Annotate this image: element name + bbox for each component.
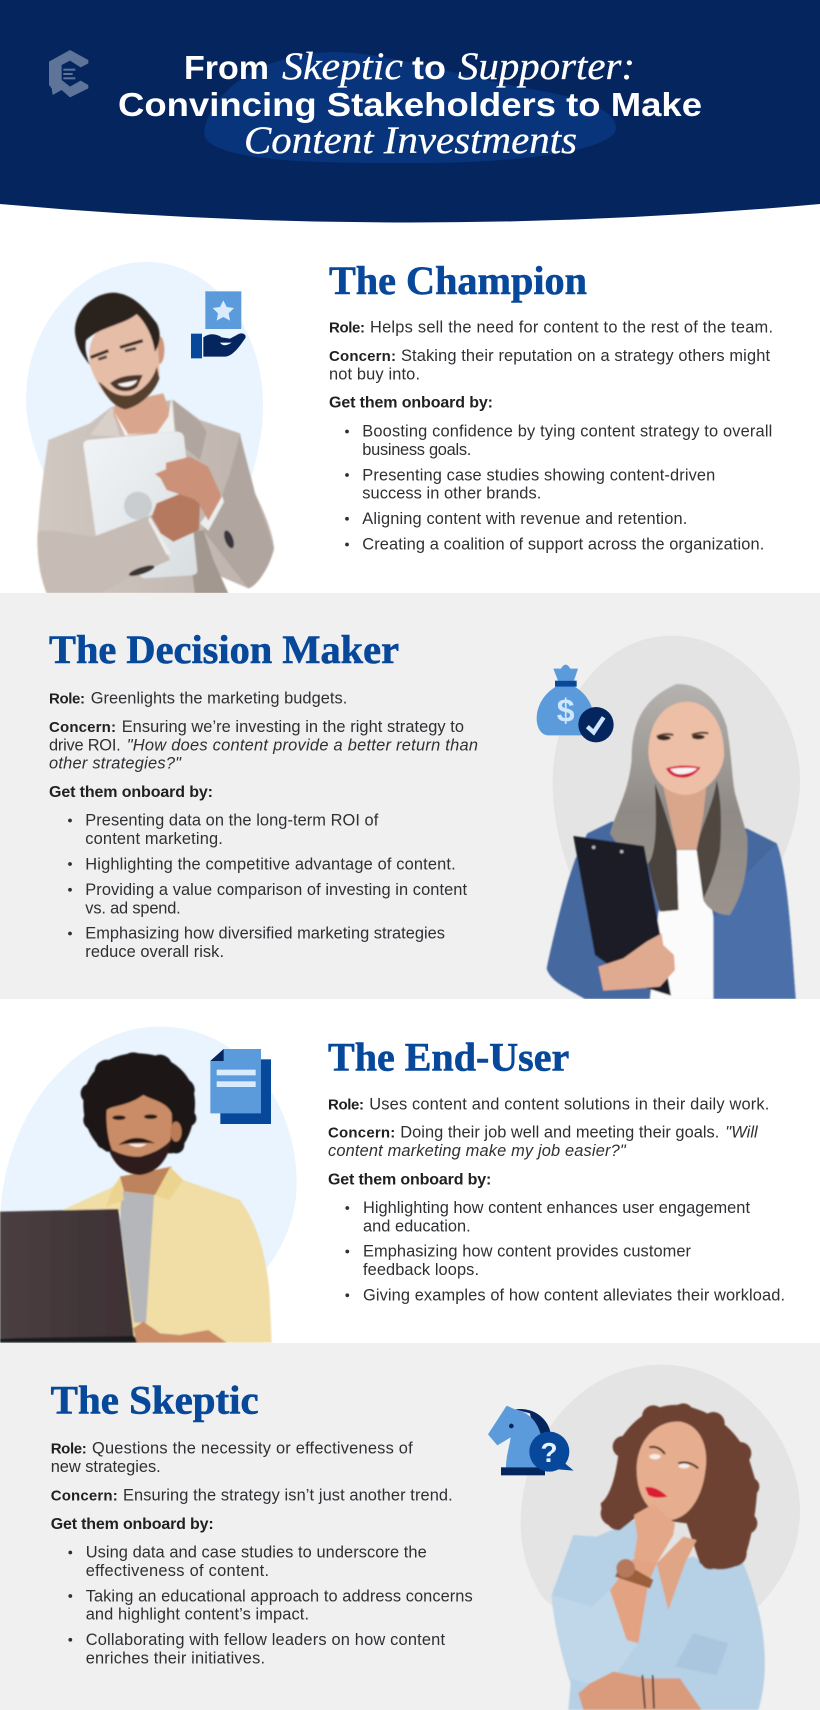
list: end-user tactics bbox=[345, 1199, 785, 1304]
blob: title highlight bbox=[204, 52, 616, 163]
heading: The Decision Maker: The Decision Maker bbox=[49, 627, 399, 672]
text: decision maker concern: Concern: bbox=[49, 719, 116, 736]
title: Supporter: bbox=[458, 45, 635, 88]
list: decision maker tactics: Highlighting the competitive advantage of content. bbox=[85, 855, 456, 873]
text: decision maker concern: Ensuring we’re investing in the right strategy to bbox=[122, 718, 464, 736]
panel: The End-User bbox=[0, 999, 820, 1343]
text: champion role: Role: bbox=[329, 320, 365, 337]
list: champion tactics: Presenting case studies showing content-driven bbox=[362, 466, 715, 484]
blob: decision maker backdrop bbox=[553, 636, 800, 987]
title bbox=[118, 45, 702, 162]
list: decision maker tactics: Emphasizing how diversified marketing strategies bbox=[85, 925, 445, 943]
list: champion tactics: Creating a coalition of support across the organization. bbox=[362, 536, 764, 554]
text: decision maker concern: "How does content provide a better return than bbox=[127, 736, 478, 754]
list: end-user tactics: Giving examples of how content alleviates their workload. bbox=[363, 1286, 785, 1304]
text: skeptic onboard heading: Get them onboard by: bbox=[51, 1516, 214, 1533]
panel: The Decision Maker bbox=[0, 593, 820, 999]
text: end-user role: Role: bbox=[328, 1096, 364, 1113]
text: decision maker role: Greenlights the marketing budgets. bbox=[91, 689, 347, 707]
list: skeptic tactics bbox=[68, 1544, 473, 1667]
logo bbox=[49, 50, 88, 97]
text: champion concern: Staking their reputation on a strategy others might bbox=[401, 347, 770, 365]
text: champion concern bbox=[329, 347, 770, 384]
list: end-user tactics: Emphasizing how content provides customer bbox=[363, 1243, 692, 1261]
heading: The Champion: The Champion bbox=[329, 258, 587, 303]
list: decision maker tactics: vs. ad spend. bbox=[85, 899, 181, 917]
icon: money bag with check: $ bbox=[557, 693, 575, 729]
icon: chess knight with question bubble bbox=[488, 1406, 574, 1475]
list: decision maker tactics: content marketing. bbox=[85, 830, 223, 848]
list: champion tactics: business goals. bbox=[362, 441, 471, 459]
list: skeptic tactics: effectiveness of content. bbox=[86, 1562, 269, 1580]
text: champion onboard heading: Get them onboard by: bbox=[329, 395, 493, 412]
text: champion concern: not buy into. bbox=[329, 366, 420, 384]
list: champion tactics bbox=[345, 423, 772, 554]
list: skeptic tactics: Using data and case studies to underscore the bbox=[86, 1544, 427, 1562]
photo: thoughtful woman bbox=[552, 1403, 765, 1710]
heading: The End-User: The End-User bbox=[328, 1035, 569, 1080]
text: end-user concern: "Will bbox=[725, 1124, 759, 1142]
panel: The Skeptic bbox=[0, 1343, 820, 1710]
text: end-user concern: content marketing make my job easier?" bbox=[328, 1142, 627, 1160]
list: end-user tactics: and education. bbox=[363, 1217, 471, 1235]
list: skeptic tactics: and highlight content’s impact. bbox=[86, 1606, 309, 1624]
text: decision maker concern: other strategies?" bbox=[49, 755, 182, 773]
icon: star above hand bbox=[191, 291, 246, 358]
text: skeptic role: new strategies. bbox=[51, 1458, 161, 1476]
text: skeptic role: Questions the necessity or effectiveness of bbox=[92, 1440, 413, 1458]
photo: woman with clipboard bbox=[547, 684, 796, 999]
list: skeptic tactics: enriches their initiatives. bbox=[86, 1649, 265, 1667]
list: champion tactics: Boosting confidence by tying content strategy to overall bbox=[362, 423, 772, 441]
icon: money bag with check bbox=[537, 665, 614, 742]
text: end-user role: Uses content and content solutions in their daily work. bbox=[369, 1095, 769, 1113]
text: decision maker concern: drive ROI. bbox=[49, 736, 121, 754]
text: skeptic role bbox=[51, 1440, 413, 1476]
text: end-user concern: Concern: bbox=[328, 1125, 395, 1142]
title: Convincing Stakeholders to Make bbox=[118, 86, 702, 123]
heading: The Skeptic: The Skeptic bbox=[51, 1377, 259, 1422]
text: end-user concern: Doing their job well and meeting their goals. bbox=[400, 1124, 719, 1142]
list: skeptic tactics: Taking an educational approach to address concerns bbox=[86, 1587, 473, 1605]
text: end-user concern bbox=[328, 1124, 759, 1160]
panel: header banner bbox=[0, 0, 820, 222]
list: end-user tactics: feedback loops. bbox=[363, 1261, 479, 1279]
list: decision maker tactics: Providing a value comparison of investing in content bbox=[85, 881, 467, 899]
text: champion role: Helps sell the need for content to the rest of the team. bbox=[370, 319, 773, 337]
list: decision maker tactics: reduce overall risk. bbox=[85, 943, 224, 961]
text: skeptic concern: Concern: bbox=[51, 1488, 118, 1505]
list: end-user tactics: Highlighting how content enhances user engagement bbox=[363, 1199, 750, 1217]
icon: chess knight with question bubble: ? bbox=[540, 1437, 558, 1468]
icon: documents bbox=[210, 1049, 271, 1124]
list: champion tactics: success in other brands. bbox=[362, 485, 541, 503]
title: From bbox=[184, 49, 269, 86]
list: champion tactics: Aligning content with revenue and retention. bbox=[362, 510, 687, 528]
panel: The Champion bbox=[26, 258, 773, 593]
blob: skeptic backdrop bbox=[521, 1365, 800, 1683]
list: skeptic tactics: Collaborating with fellow leaders on how content bbox=[86, 1631, 445, 1649]
text: end-user onboard heading: Get them onboard by: bbox=[328, 1172, 491, 1189]
text: skeptic role: Role: bbox=[51, 1441, 87, 1458]
title: Content Investments bbox=[244, 119, 577, 162]
text: decision maker onboard heading: Get them onboard by: bbox=[49, 784, 213, 801]
text: champion concern: Concern: bbox=[329, 348, 396, 365]
list: decision maker tactics: Presenting data on the long-term ROI of bbox=[85, 812, 379, 830]
text: decision maker concern bbox=[49, 718, 478, 773]
blob: champion backdrop bbox=[26, 262, 263, 539]
photo: man at laptop bbox=[0, 1052, 272, 1343]
title: Skeptic bbox=[282, 45, 403, 88]
photo: man holding laptop bbox=[37, 293, 274, 593]
text: skeptic concern: Ensuring the strategy isn’t just another trend. bbox=[123, 1487, 453, 1505]
title: to bbox=[412, 49, 446, 86]
text: decision maker role: Role: bbox=[49, 690, 85, 707]
list: decision maker tactics bbox=[68, 812, 467, 961]
blob: end-user backdrop bbox=[0, 1027, 297, 1343]
